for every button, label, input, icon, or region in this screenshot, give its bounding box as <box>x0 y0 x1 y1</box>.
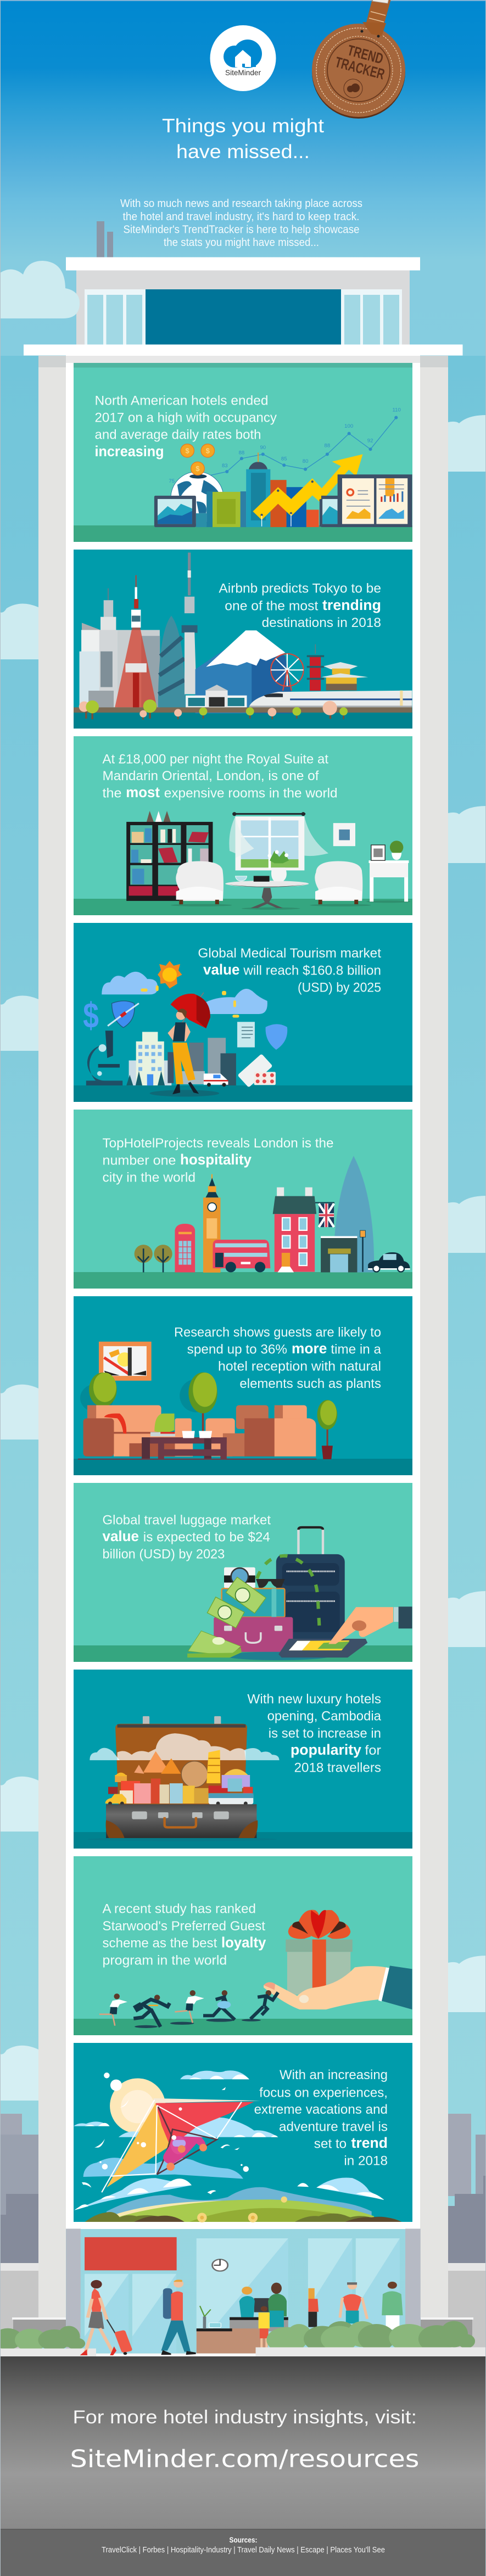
Union Jack flag <box>315 1202 334 1227</box>
Big Ben <box>203 1174 220 1273</box>
text: hotel reception plants: Research shows guests are likely to <box>174 1325 381 1340</box>
birds and bubbles <box>82 2087 249 2194</box>
camera <box>224 1567 255 1588</box>
navy suitcase <box>276 1527 345 1642</box>
tablet with payment <box>278 1639 367 1657</box>
illustration: reception with sofas and plants <box>78 1342 337 1460</box>
pavement <box>0 2347 486 2356</box>
yellow taxi <box>105 1794 126 1805</box>
text: Cambodia: for <box>365 1743 381 1758</box>
open hand <box>264 1965 412 2009</box>
entrance pillars <box>66 2228 421 2356</box>
text: London hospitality: city in the world <box>102 1171 195 1185</box>
text: Royal Suite: the <box>102 786 122 800</box>
center plant <box>180 1373 217 1434</box>
text: London hospitality <box>102 1136 334 1185</box>
text: adventure travel: trend <box>351 2135 388 2151</box>
text: North American hotels: increasing <box>94 443 164 460</box>
teal case <box>222 1588 285 1617</box>
text: hotel reception plants <box>174 1325 382 1391</box>
armchair left <box>171 861 232 906</box>
child <box>259 2306 270 2347</box>
panel background <box>74 1296 412 1475</box>
hand pressing tablet <box>328 1606 412 1644</box>
domed museum <box>186 685 247 707</box>
text: London hospitality: hospitality <box>180 1151 252 1168</box>
pink suitcase <box>214 1617 293 1652</box>
line chart: 75 <box>169 478 175 484</box>
running people <box>99 1990 278 2028</box>
sources list: TravelClick | Forbes | Hospitality-Industry | Travel Daily News | Escape | Places You'll See <box>102 2546 385 2555</box>
hills and mountains <box>74 2177 384 2222</box>
suitcase base <box>106 1804 258 1838</box>
illustration: gift in hand and running people <box>99 1910 412 2028</box>
red sign <box>85 2237 177 2270</box>
receptionist <box>239 2287 255 2317</box>
suitcase lid <box>87 1716 277 1841</box>
line chart: 100 <box>344 423 353 429</box>
globe <box>171 472 224 524</box>
reception desk <box>197 2298 288 2354</box>
text: hotel reception plants: hotel reception with natural <box>218 1359 381 1374</box>
text: Airbnb Tokyo: Airbnb predicts Tokyo to be <box>219 581 381 596</box>
text: hotel reception plants: elements such as plants <box>239 1376 381 1391</box>
trees <box>135 1245 172 1272</box>
report book <box>338 474 412 527</box>
pagoda <box>307 644 324 691</box>
illustration: open suitcase with miniature city <box>87 1716 280 1841</box>
panel: London hospitality <box>74 1110 412 1289</box>
left sofa <box>83 1405 193 1457</box>
text: hotel reception plants: time in a <box>331 1342 382 1357</box>
guest at window 2 <box>340 2282 367 2323</box>
line chart: 83 <box>222 463 228 469</box>
text: Cambodia: popularity <box>291 1741 361 1758</box>
text: Royal Suite: most <box>126 784 160 800</box>
line chart: 85 <box>281 456 287 462</box>
round table with vase, book, teacup <box>225 850 309 910</box>
intro text <box>120 198 362 249</box>
panel background <box>74 1110 412 1289</box>
Ferris wheel and tower <box>181 1750 220 1788</box>
text: Airbnb Tokyo: destinations in 2018 <box>262 615 381 630</box>
Mount Fuji <box>195 630 295 713</box>
coins <box>181 444 215 475</box>
text: North American hotels: 2017 on a high with occupancy <box>94 410 277 425</box>
right potted plant <box>317 1400 337 1459</box>
text: Starwood loyalty: scheme as the best <box>102 1936 217 1951</box>
panel: travel luggage market <box>74 1483 412 1662</box>
text: Cambodia <box>247 1692 382 1775</box>
text: London hospitality: number one <box>102 1153 176 1168</box>
glass doors left <box>85 2274 176 2353</box>
shrubs left <box>0 2326 85 2351</box>
panel: hotel reception plants <box>74 1296 412 1475</box>
text: travel luggage market: value <box>102 1528 139 1544</box>
bookshelf <box>126 811 213 901</box>
armchair right <box>310 861 371 906</box>
panel background <box>74 736 412 915</box>
right windows <box>308 2238 400 2332</box>
runner 3 <box>175 1990 204 2023</box>
miniature city <box>108 1769 253 1804</box>
left office towers <box>80 589 186 707</box>
line chart: 88 <box>325 443 330 449</box>
rising yellow arrow <box>253 454 363 527</box>
text: Medical Tourism: value <box>203 961 239 978</box>
right sofa <box>205 1405 316 1457</box>
panel: Royal Suite <box>74 736 412 915</box>
line chart: 110 <box>392 407 401 413</box>
text: adventure travel: extreme vacations and <box>254 2102 388 2117</box>
title: Things you might <box>162 115 324 137</box>
text: Medical Tourism: Global Medical Tourism market <box>198 946 381 961</box>
panel: Medical Tourism <box>74 923 412 1102</box>
golden pavilion <box>321 662 368 691</box>
sofa floor shadow <box>78 1459 316 1460</box>
guest woman in green <box>268 2283 287 2327</box>
text: Royal Suite: expensive rooms in the world <box>164 786 338 800</box>
flying banknotes <box>207 1577 266 1628</box>
footer call to action: For more hotel industry insights, visit: <box>72 2407 417 2428</box>
text: Royal Suite: At £18,000 per night the Royal Suite at <box>102 752 328 766</box>
line chart: 90 <box>260 445 266 451</box>
panel: Airbnb Tokyo <box>74 550 412 729</box>
line chart: 88 <box>239 450 244 456</box>
red bow <box>288 1910 350 1939</box>
footer band <box>0 2356 486 2529</box>
gift box <box>286 1940 353 1995</box>
panel background <box>74 923 412 1102</box>
runner 1 <box>99 1993 127 2026</box>
blue shield <box>266 1024 287 1050</box>
text: Medical Tourism: (USD) by 2025 <box>298 981 381 995</box>
coins: $ <box>186 447 190 455</box>
text: adventure travel: set to <box>314 2137 347 2151</box>
coins: $ <box>206 447 210 455</box>
panel: Cambodia <box>74 1670 412 1849</box>
gray city <box>167 1038 236 1085</box>
text: Medical Tourism <box>198 946 381 995</box>
illustration: luxury suite interior <box>126 811 410 910</box>
text: London hospitality: TopHotelProjects reveals London is the <box>102 1136 334 1151</box>
lobby window <box>197 2238 288 2354</box>
floor shadow <box>225 1651 331 1660</box>
intro text: the stats you might have missed... <box>164 237 319 249</box>
logo: SiteMinder <box>210 25 276 91</box>
text: North American hotels: and average daily rates both <box>94 428 261 443</box>
chimneys <box>97 221 113 257</box>
illustration: hotel growth skyline and chart <box>154 407 412 527</box>
line chart: 80 <box>303 458 308 464</box>
text: hotel reception plants: more <box>292 1340 327 1357</box>
title <box>162 115 324 163</box>
sun <box>104 2073 165 2133</box>
line chart <box>169 407 401 484</box>
cloud by the roof <box>0 261 80 318</box>
illustration: Tokyo skyline <box>74 552 412 720</box>
pill blisters <box>237 1054 276 1088</box>
tree line and hay bales <box>85 2197 401 2222</box>
text: Royal Suite: Mandarin Oriental, London, is one of <box>102 769 319 783</box>
Ferris wheel <box>271 654 304 691</box>
text: Cambodia: 2018 travellers <box>294 1760 381 1775</box>
dashed green trail <box>257 1556 320 1631</box>
panel background <box>74 2043 412 2222</box>
text: Starwood loyalty: program in the world <box>102 1953 227 1968</box>
background clouds <box>0 415 486 2101</box>
pilot <box>163 2135 207 2171</box>
pills floating <box>141 985 239 1017</box>
runner 4 <box>203 1990 235 2020</box>
text: adventure travel: focus on experiences, <box>259 2086 388 2101</box>
intro text: With so much news and research taking place across <box>120 198 362 210</box>
logo: SiteMinder: SiteMinder <box>225 69 261 77</box>
illustration: London landmarks <box>135 1156 410 1273</box>
sources band <box>0 2529 486 2576</box>
bullet train <box>249 691 412 707</box>
illustration: hang glider over hills <box>74 2070 401 2222</box>
runner 5 <box>250 1990 278 2019</box>
hotel ground floor entrance <box>0 2228 486 2356</box>
red townhouse <box>273 1188 316 1272</box>
panel background <box>74 1670 412 1849</box>
text: adventure travel <box>254 2068 388 2168</box>
panel: North American hotels <box>74 363 412 542</box>
street lamp <box>360 1230 365 1272</box>
phone box <box>175 1224 195 1272</box>
microscope <box>86 1031 122 1085</box>
Skytree <box>182 552 198 695</box>
text: adventure travel: in 2018 <box>344 2153 388 2168</box>
framed picture <box>333 823 355 846</box>
panel: Starwood loyalty <box>74 1856 412 2035</box>
text: Airbnb Tokyo <box>219 581 381 630</box>
Tokyo Tower <box>115 575 157 707</box>
footer call to action <box>70 2407 420 2473</box>
icon: leather trend tracker luggage tag: TRACKER <box>333 54 387 83</box>
man with backpack <box>161 2280 196 2355</box>
panel background <box>74 550 412 729</box>
text: Starwood loyalty: A recent study has ranked <box>102 1902 256 1916</box>
guest at window 1 <box>308 2288 319 2327</box>
sunglasses <box>256 1579 285 1588</box>
hotel side columns <box>38 356 448 2318</box>
ambulance <box>204 1073 228 1087</box>
text: travel luggage market <box>102 1513 271 1562</box>
clouds and sun <box>102 961 267 1014</box>
text: Royal Suite <box>102 752 338 800</box>
guest at window 3 <box>382 2282 403 2329</box>
text: North American hotels <box>94 394 277 460</box>
text: Cambodia: is set to increase in <box>269 1726 381 1741</box>
text: adventure travel: adventure travel is <box>279 2119 388 2134</box>
icon: leather trend tracker luggage tag <box>312 0 405 119</box>
shrubs right <box>266 2321 475 2353</box>
text: Cambodia: With new luxury hotels <box>247 1692 381 1706</box>
hotel rooftop <box>66 257 420 345</box>
shadow under woman <box>150 1090 219 1096</box>
side table <box>366 841 410 903</box>
shield with syringe <box>108 1001 139 1028</box>
text: travel luggage market: Global travel luggage market <box>102 1513 271 1527</box>
text: Starwood loyalty: Starwood's Preferred Guest <box>102 1919 265 1934</box>
hospital <box>126 1032 171 1085</box>
side wings at ground level <box>12 2317 473 2342</box>
sky clouds <box>74 2070 278 2179</box>
waterfront <box>74 707 412 713</box>
panel background <box>74 1483 412 1662</box>
second tablet <box>321 496 340 527</box>
window with curtains <box>229 812 328 870</box>
tour bus <box>209 1793 253 1805</box>
shop <box>321 1236 357 1272</box>
footer call to action: SiteMinder.com/resources <box>70 2445 420 2473</box>
intro text: the hotel and travel industry, it's hard to keep track. <box>123 211 359 223</box>
hotel body <box>24 345 462 2229</box>
left tablet <box>154 496 196 527</box>
text: hotel reception plants: spend up to 36% <box>187 1342 287 1357</box>
woman with red umbrella <box>167 993 210 1094</box>
illustration: medical tourism <box>83 961 287 1096</box>
woman with suitcase <box>80 2280 133 2355</box>
city buildings <box>196 452 319 527</box>
text: Starwood loyalty <box>102 1902 266 1968</box>
text: Starwood loyalty: loyalty <box>221 1934 266 1951</box>
document <box>237 1022 255 1048</box>
intro text: SiteMinder's TrendTracker is here to help showcase <box>123 224 359 236</box>
runner 2 <box>133 1995 170 2027</box>
sources heading: Sources: <box>230 2535 257 2544</box>
panel background <box>74 363 412 542</box>
dollar sign: $ <box>83 995 99 1035</box>
text: Airbnb Tokyo: one of the most <box>225 598 319 613</box>
text: Airbnb Tokyo: trending <box>322 597 381 613</box>
title: have missed... <box>176 141 310 163</box>
wall painting <box>99 1342 152 1381</box>
line chart: 92 <box>367 438 373 444</box>
clouds in suitcase <box>90 1733 280 1760</box>
background city skyline <box>0 2114 486 2350</box>
mountains <box>134 1751 181 1774</box>
text: Cambodia: opening, Cambodia <box>267 1709 382 1724</box>
stack of banknotes <box>187 1631 242 1657</box>
text: travel luggage market: is expected to be $24 <box>143 1530 270 1545</box>
text: adventure travel: With an increasing <box>280 2068 388 2082</box>
left plant <box>80 1373 117 1412</box>
hang glider <box>102 2098 261 2192</box>
coffee table <box>142 1431 227 1459</box>
icon: leather trend tracker luggage tag: TREND <box>346 42 385 67</box>
Gherkin <box>333 1156 374 1272</box>
row of trees <box>79 699 348 720</box>
panel: adventure travel <box>74 2043 412 2222</box>
panel background <box>74 1856 412 2035</box>
illustration: luggage and payment <box>187 1527 412 1660</box>
text: travel luggage market: billion (USD) by 2023 <box>102 1547 225 1562</box>
black cab <box>368 1252 410 1272</box>
text: Medical Tourism: will reach $160.8 billion <box>243 963 381 978</box>
coins: $ <box>195 464 200 473</box>
text: North American hotels: North American hotels ended <box>94 394 268 408</box>
red bus <box>213 1240 270 1272</box>
wall clock <box>213 2259 228 2271</box>
